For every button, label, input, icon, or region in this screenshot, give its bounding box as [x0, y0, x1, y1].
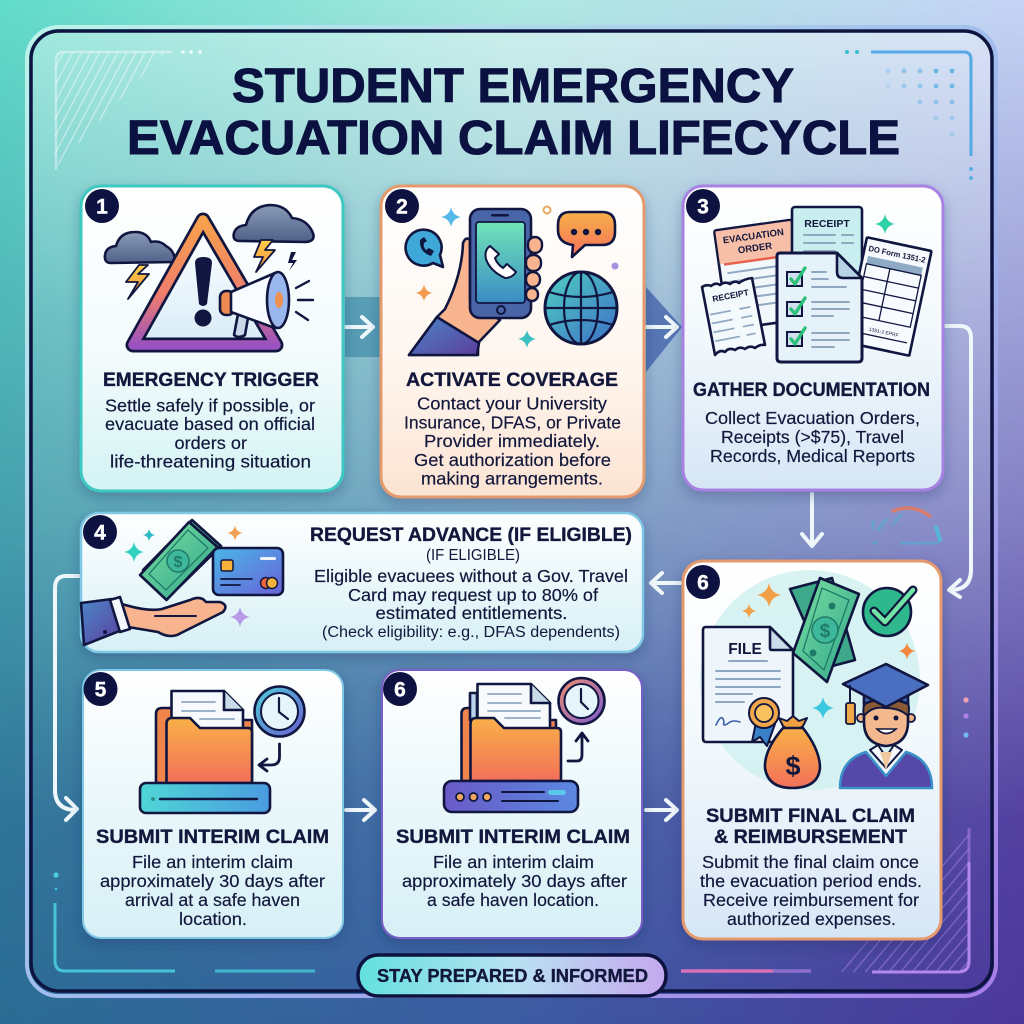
icon: stack of documents — [702, 207, 932, 362]
step badge 2: 2 — [396, 196, 408, 218]
icon: folder on tray with clock — [140, 686, 304, 813]
description: Get authorization before — [414, 450, 611, 470]
panel: final claim and reimbursement — [683, 561, 941, 939]
heading: ACTIVATE COVERAGE — [406, 369, 618, 391]
icon: file, money, bag and graduate: $ — [785, 751, 801, 781]
step badge 6: 6 — [394, 678, 406, 702]
step badge 5: 5 — [95, 678, 107, 702]
heading: REQUEST ADVANCE (IF ELIGIBLE) — [310, 524, 632, 546]
icon: file, money, bag and graduate: $ — [820, 621, 831, 642]
panel: step 6 submit interim claim — [382, 670, 642, 938]
description: Eligible evacuees without a Gov. Travel — [314, 566, 628, 586]
icon: stack of documents: 1351-2 EPRF — [868, 327, 899, 339]
icon: file, money, bag and graduate — [700, 570, 932, 790]
description — [314, 547, 628, 641]
description: Card may request up to 80% of — [348, 585, 598, 605]
description: approximately 30 days after — [402, 871, 627, 891]
description: (Check eligibility: e.g., DFAS dependents) — [322, 624, 620, 641]
step badge 4: 4 — [94, 522, 106, 544]
icon: storm warning with megaphone — [105, 205, 314, 345]
description: a safe haven location. — [427, 890, 599, 910]
connectors and arrows between steps — [55, 287, 971, 820]
description: Records, Medical Reports — [710, 446, 915, 466]
description: Collect Evacuation Orders, — [705, 408, 920, 428]
heading: & REIMBURSEMENT — [714, 826, 907, 848]
icon: folder on server with clock — [444, 678, 604, 812]
description: making arrangements. — [421, 468, 603, 488]
description: Submit the final claim once — [702, 852, 919, 872]
description — [100, 852, 325, 929]
description — [700, 852, 922, 929]
description: evacuate based on official — [105, 414, 315, 434]
icon: stack of documents: EVACUATION — [722, 227, 785, 246]
description: Insurance, DFAS, or Private — [404, 412, 621, 432]
step badge 4 — [83, 515, 117, 549]
description — [705, 408, 920, 466]
description — [105, 396, 315, 472]
description: Receive reimbursement for — [703, 890, 919, 910]
title: STUDENT EMERGENCY — [232, 60, 794, 113]
description: the evacuation period ends. — [700, 871, 922, 891]
description — [404, 394, 621, 488]
heading: SUBMIT INTERIM CLAIM — [396, 826, 630, 848]
description: Receipts (>$75), Travel — [721, 427, 904, 447]
panel: step 1 emergency trigger — [81, 186, 343, 491]
panel: step 4 request advance — [81, 513, 643, 652]
footer banner: STAY PREPARED & INFORMED — [377, 966, 648, 986]
description: approximately 30 days after — [100, 871, 325, 891]
step badge 6 — [383, 672, 417, 706]
title — [127, 60, 900, 165]
icon: stack of documents: ORDER — [737, 241, 773, 256]
panel: step 2 activate coverage — [381, 186, 644, 497]
description — [402, 852, 627, 910]
icon: hand with cash and credit card — [81, 520, 283, 645]
description: (IF ELIGIBLE) — [426, 547, 520, 564]
description: orders or — [174, 433, 247, 453]
step badge 6 final: 6 — [697, 572, 709, 594]
description: location. — [179, 909, 247, 929]
step badge 2 — [385, 189, 419, 223]
description: authorized expenses. — [727, 909, 896, 929]
icon: hand with cash and credit card: $ — [174, 554, 183, 571]
icon: hand holding phone with globe and chat bubbles — [406, 206, 618, 355]
heading: EMERGENCY TRIGGER — [103, 369, 319, 391]
heading: SUBMIT INTERIM CLAIM — [96, 826, 329, 848]
panel: step 5 submit interim claim — [83, 670, 343, 938]
description: life-threatening situation — [110, 452, 311, 472]
description: Contact your University — [417, 394, 607, 414]
panel: step 3 gather documentation — [683, 186, 943, 490]
heading: GATHER DOCUMENTATION — [693, 379, 930, 401]
footer banner — [358, 955, 666, 996]
description: Settle safely if possible, or — [105, 396, 315, 416]
heading: SUBMIT FINAL CLAIM — [706, 805, 915, 827]
step badge 6 final — [686, 565, 720, 599]
icon: stack of documents: DO Form 1351-2 — [868, 244, 927, 265]
heading — [706, 805, 915, 848]
icon: stack of documents: RECEIPT — [711, 287, 750, 304]
step badge 5 — [84, 672, 118, 706]
icon: stack of documents: RECEIPT — [804, 218, 850, 230]
description: Provider immediately. — [424, 431, 600, 451]
description: estimated entitlements. — [376, 603, 568, 623]
step badge 1: 1 — [96, 196, 108, 218]
icon: file, money, bag and graduate: FILE — [728, 641, 762, 658]
description: File an interim claim — [433, 852, 594, 872]
step badge 1 — [85, 189, 119, 223]
step badge 3 — [686, 189, 720, 223]
title: EVACUATION CLAIM LIFECYCLE — [127, 112, 900, 165]
description: File an interim claim — [132, 852, 293, 872]
step badge 3: 3 — [697, 196, 709, 218]
description: arrival at a safe haven — [125, 890, 300, 910]
